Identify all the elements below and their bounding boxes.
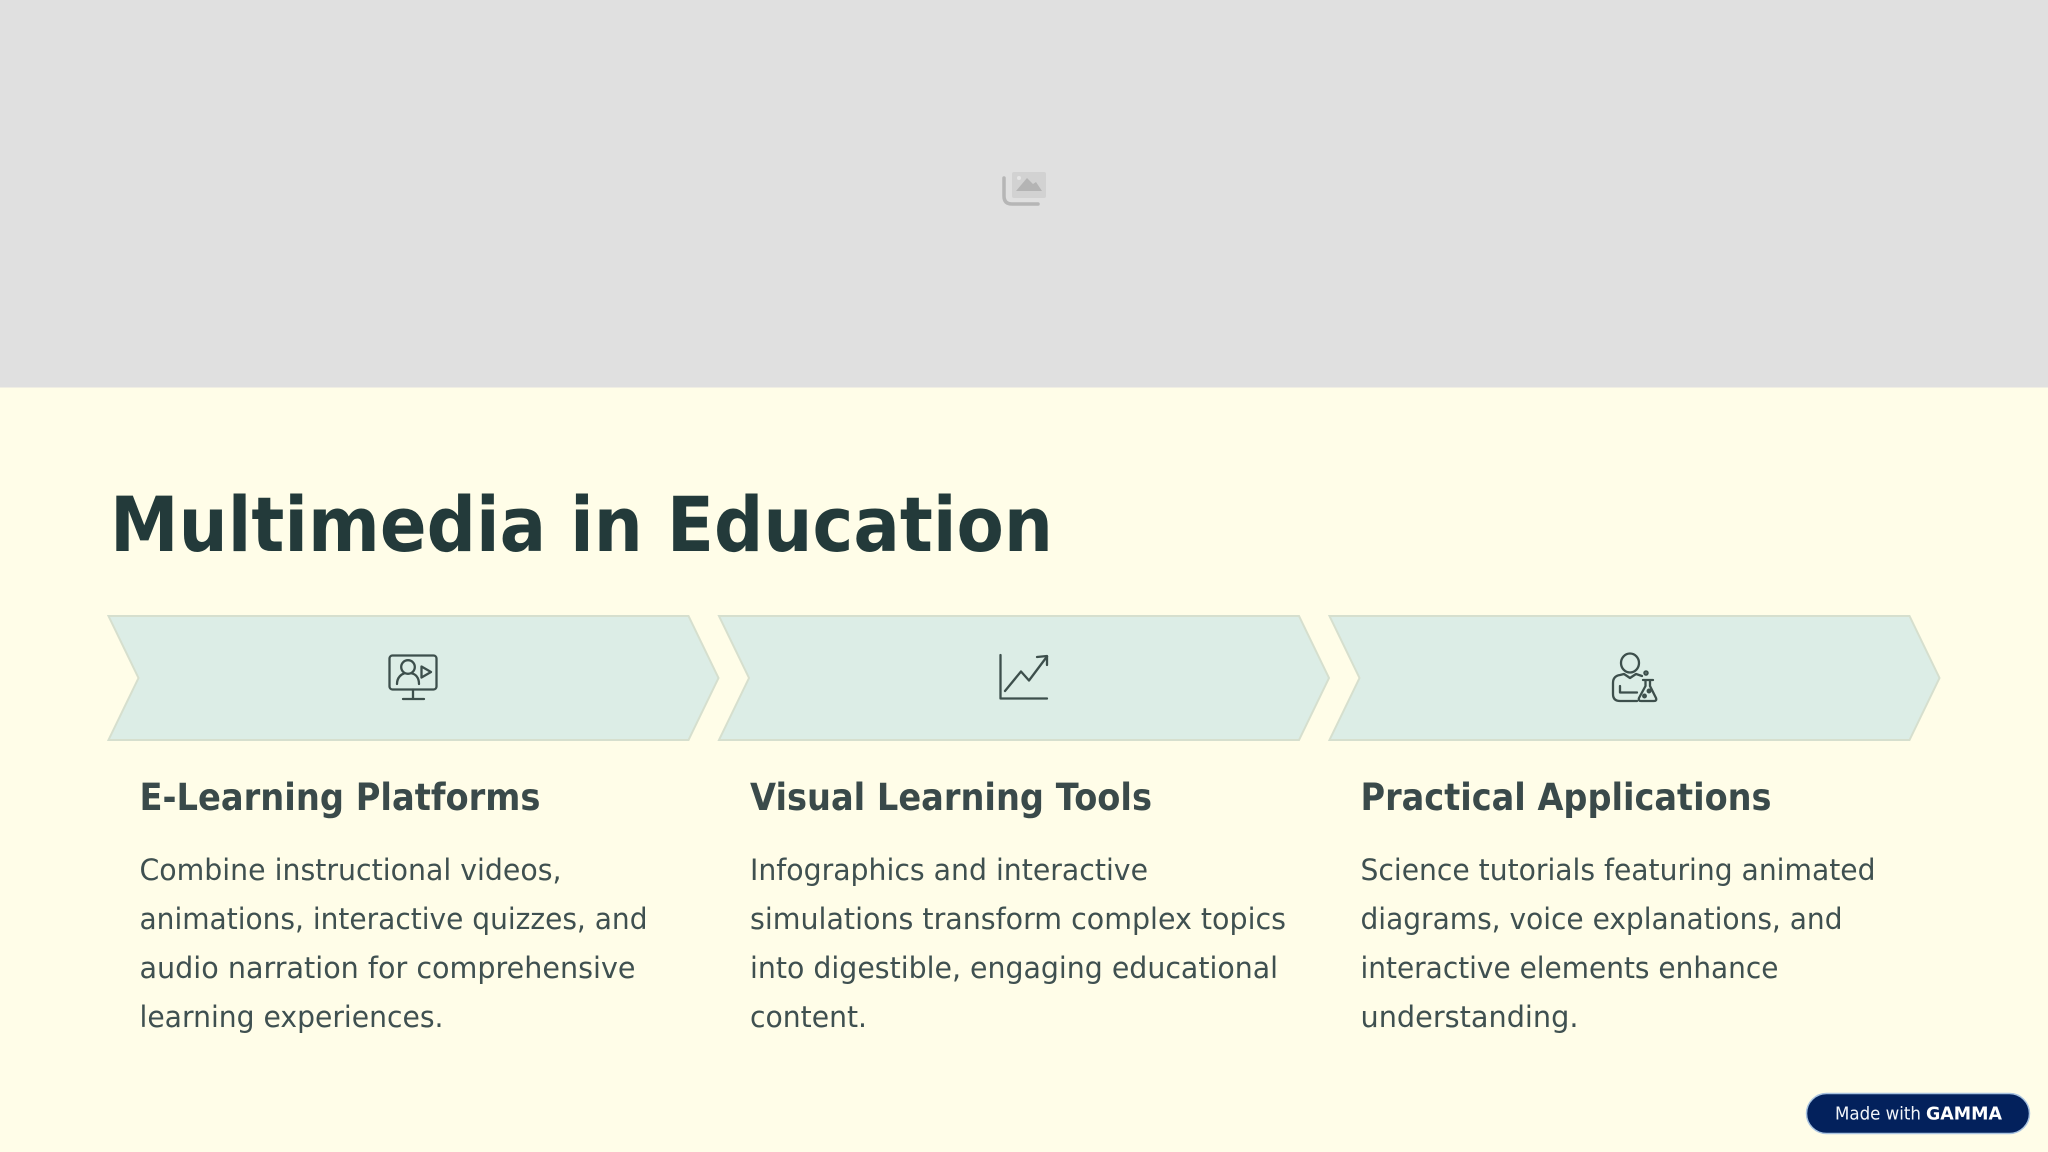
body text: animations, interactive quizzes, and bbox=[140, 902, 648, 936]
panel: e-learning platforms bbox=[108, 616, 718, 1034]
body text bbox=[750, 853, 1286, 1034]
icon: presenter on screen with play button bbox=[390, 656, 436, 699]
body text: into digestible, engaging educational bbox=[750, 951, 1278, 985]
body text bbox=[1360, 853, 1876, 1034]
badge: made with gamma bbox=[1806, 1094, 2030, 1134]
chevron 2 bbox=[719, 616, 1329, 740]
heading: Visual Learning Tools bbox=[750, 776, 1152, 819]
badge: made with gamma: Made with bbox=[1835, 1104, 1921, 1124]
icon: rising line chart bbox=[1000, 655, 1047, 698]
icon: person with science flask bbox=[1613, 654, 1656, 701]
body text: content. bbox=[750, 1000, 867, 1034]
body text: understanding. bbox=[1360, 1000, 1578, 1034]
body text: audio narration for comprehensive bbox=[140, 951, 636, 985]
heading: Practical Applications bbox=[1360, 776, 1772, 819]
body text bbox=[140, 853, 648, 1034]
body text: Infographics and interactive bbox=[750, 853, 1148, 887]
chevron 3 bbox=[1330, 616, 1940, 740]
badge: made with gamma: GAMMA bbox=[1926, 1104, 2002, 1124]
image placeholder panel bbox=[0, 0, 2048, 388]
heading: E-Learning Platforms bbox=[140, 776, 540, 819]
panel: practical applications bbox=[1330, 616, 1940, 1034]
icon: image placeholder bbox=[1004, 172, 1046, 204]
body text: Science tutorials featuring animated bbox=[1360, 853, 1876, 887]
body text: Combine instructional videos, bbox=[140, 853, 562, 887]
body text: learning experiences. bbox=[140, 1000, 444, 1034]
chevron 1 bbox=[108, 616, 718, 740]
body text: interactive elements enhance bbox=[1360, 951, 1778, 985]
panel: visual learning tools bbox=[719, 616, 1329, 1034]
title: Multimedia in Education bbox=[110, 480, 1053, 569]
body text: diagrams, voice explanations, and bbox=[1360, 902, 1842, 936]
body text: simulations transform complex topics bbox=[750, 902, 1286, 936]
